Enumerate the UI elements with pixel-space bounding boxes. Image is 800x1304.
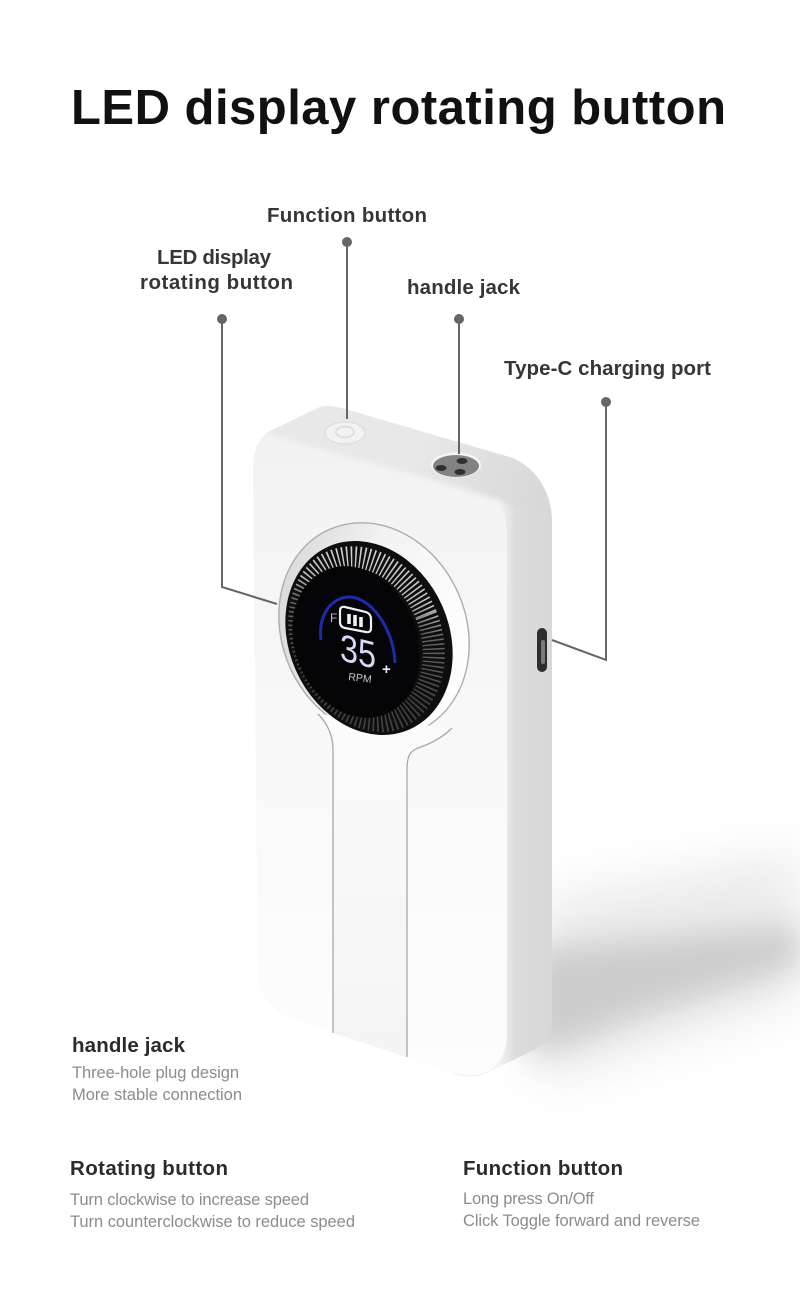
knob ridges <box>288 546 445 732</box>
panel groove <box>318 714 452 1057</box>
label: LED display rotating button <box>140 246 293 294</box>
leader: LED display <box>217 314 277 604</box>
body top face <box>270 406 550 504</box>
F label: F <box>330 611 337 625</box>
note: rotating button <box>70 1157 355 1231</box>
label: LED display rotating button: rotating button <box>140 271 293 294</box>
leader: handle jack <box>454 314 464 454</box>
plus sign: + <box>382 661 391 678</box>
label: LED display rotating button: LED display <box>157 246 272 269</box>
floor shadow <box>530 850 800 1085</box>
screen <box>270 547 442 737</box>
note: handle jack <box>72 1034 242 1104</box>
handle jack socket <box>431 452 481 478</box>
dial <box>278 522 470 1057</box>
leader: function button <box>342 237 352 419</box>
dial silver ring <box>245 492 503 768</box>
center panel <box>318 714 452 1057</box>
title: LED display rotating button <box>71 81 726 135</box>
note: rotating button: Turn counterclockwise to reduce speed <box>70 1213 355 1231</box>
RPM label: RPM <box>348 671 372 686</box>
label: handle jack: handle jack <box>407 276 521 299</box>
note: function button <box>463 1157 700 1230</box>
label: Type-C charging port: Type-C charging port <box>504 357 711 380</box>
battery icon <box>340 607 371 632</box>
note: handle jack: More stable connection <box>72 1086 242 1104</box>
body side and base silhouette <box>253 406 552 1077</box>
knob body <box>255 514 483 762</box>
leader: Type-C <box>552 397 611 660</box>
power button <box>325 422 365 444</box>
body front face <box>253 431 507 1075</box>
label: Function button: Function button <box>267 204 427 227</box>
note: rotating button: Turn clockwise to increase speed <box>70 1191 309 1209</box>
note: handle jack: handle jack <box>72 1034 186 1057</box>
note: rotating button: Rotating button <box>70 1157 228 1180</box>
note: function button: Function button <box>463 1157 623 1180</box>
note: function button: Click Toggle forward and reverse <box>463 1212 700 1230</box>
speed readout: 35 <box>340 627 376 678</box>
blue speed arc <box>321 597 395 663</box>
Type-C port <box>537 628 547 672</box>
note: function button: Long press On/Off <box>463 1190 594 1208</box>
note: handle jack: Three-hole plug design <box>72 1064 239 1082</box>
device body <box>253 395 560 1077</box>
